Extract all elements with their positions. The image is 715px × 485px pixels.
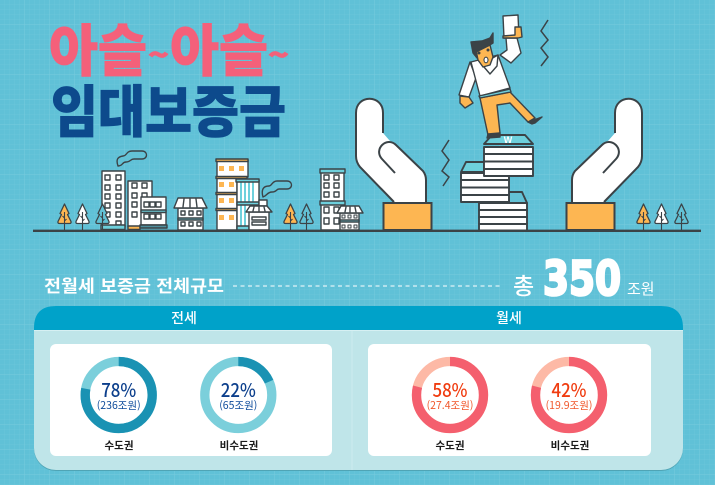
panel header	[34, 306, 683, 330]
belt	[479, 89, 511, 98]
head	[476, 45, 493, 67]
man figure	[459, 15, 542, 138]
building: low apartment	[140, 197, 167, 228]
right hand	[566, 99, 642, 230]
donut: wolse non-capital area: 42%	[552, 376, 587, 403]
shop 3	[337, 206, 363, 230]
smoke right	[262, 181, 292, 197]
building: right tower	[320, 169, 345, 230]
smoke left	[117, 151, 146, 166]
card: wolse	[368, 344, 651, 456]
header: jeonse: 전세	[171, 308, 197, 328]
donut: wolse capital area	[416, 362, 484, 453]
stack bottom	[479, 192, 527, 230]
total amount	[513, 252, 655, 307]
donut: jeonse non-capital area	[205, 362, 272, 453]
stack middle	[461, 162, 509, 202]
money stacks	[461, 135, 533, 230]
title	[49, 7, 289, 149]
stack top: W	[504, 135, 513, 145]
card: jeonse	[50, 344, 332, 456]
donut: wolse non-capital area: 비수도권	[551, 438, 589, 453]
trees	[58, 204, 688, 230]
total unit: 조원	[627, 278, 655, 299]
left cuff	[384, 203, 432, 230]
donut: wolse non-capital area	[536, 362, 602, 453]
total number: 350	[543, 252, 621, 307]
title line 1: ~	[268, 34, 289, 74]
building: tower 1	[101, 171, 125, 230]
left hand	[460, 96, 473, 108]
donut: jeonse capital area	[85, 362, 152, 453]
phone hand	[503, 27, 522, 38]
right cuff	[566, 203, 614, 230]
donut: jeonse non-capital area: 22%	[221, 376, 256, 403]
dashed leader	[233, 285, 501, 287]
donut: jeonse capital area: 78%	[101, 376, 136, 403]
title line 1: 아슬	[49, 7, 147, 88]
ground line	[33, 230, 701, 232]
donut: wolse capital area: (27.4조원)	[427, 398, 473, 413]
title line 2: 임대보증금	[51, 68, 286, 149]
building: glass tower	[236, 179, 259, 230]
main panel	[34, 306, 683, 471]
left arm	[459, 62, 476, 97]
city illustration	[101, 151, 363, 230]
collar	[478, 55, 498, 74]
torso	[471, 55, 510, 96]
title line 1: 아슬	[170, 7, 268, 88]
section heading: 전월세 보증금 전체규모	[44, 272, 224, 297]
donut: jeonse capital area: 수도권	[105, 438, 133, 453]
left hand	[356, 99, 432, 230]
donut: jeonse capital area: (236조원)	[97, 398, 141, 413]
shop 2	[246, 200, 272, 230]
right arm	[500, 38, 521, 63]
hair	[471, 33, 493, 58]
shop 1	[174, 198, 207, 230]
donut: jeonse non-capital area: 비수도권	[220, 438, 258, 453]
donut: jeonse non-capital area: (65조원)	[219, 398, 257, 413]
pants	[480, 92, 535, 135]
shoes	[528, 117, 542, 124]
building: tall yellow-window tower	[216, 159, 248, 230]
shake marks	[442, 20, 548, 186]
title line 1: ~	[148, 34, 169, 74]
face	[484, 57, 488, 63]
header: wolse: 월세	[496, 308, 522, 328]
phone	[503, 15, 519, 38]
total prefix: 총	[513, 267, 534, 301]
title line 1	[49, 7, 289, 88]
donut: wolse non-capital area: (19.9조원)	[546, 398, 592, 413]
donut: wolse capital area: 수도권	[436, 438, 464, 453]
building: tower 2	[128, 181, 152, 230]
donut: wolse capital area: 58%	[432, 376, 468, 403]
